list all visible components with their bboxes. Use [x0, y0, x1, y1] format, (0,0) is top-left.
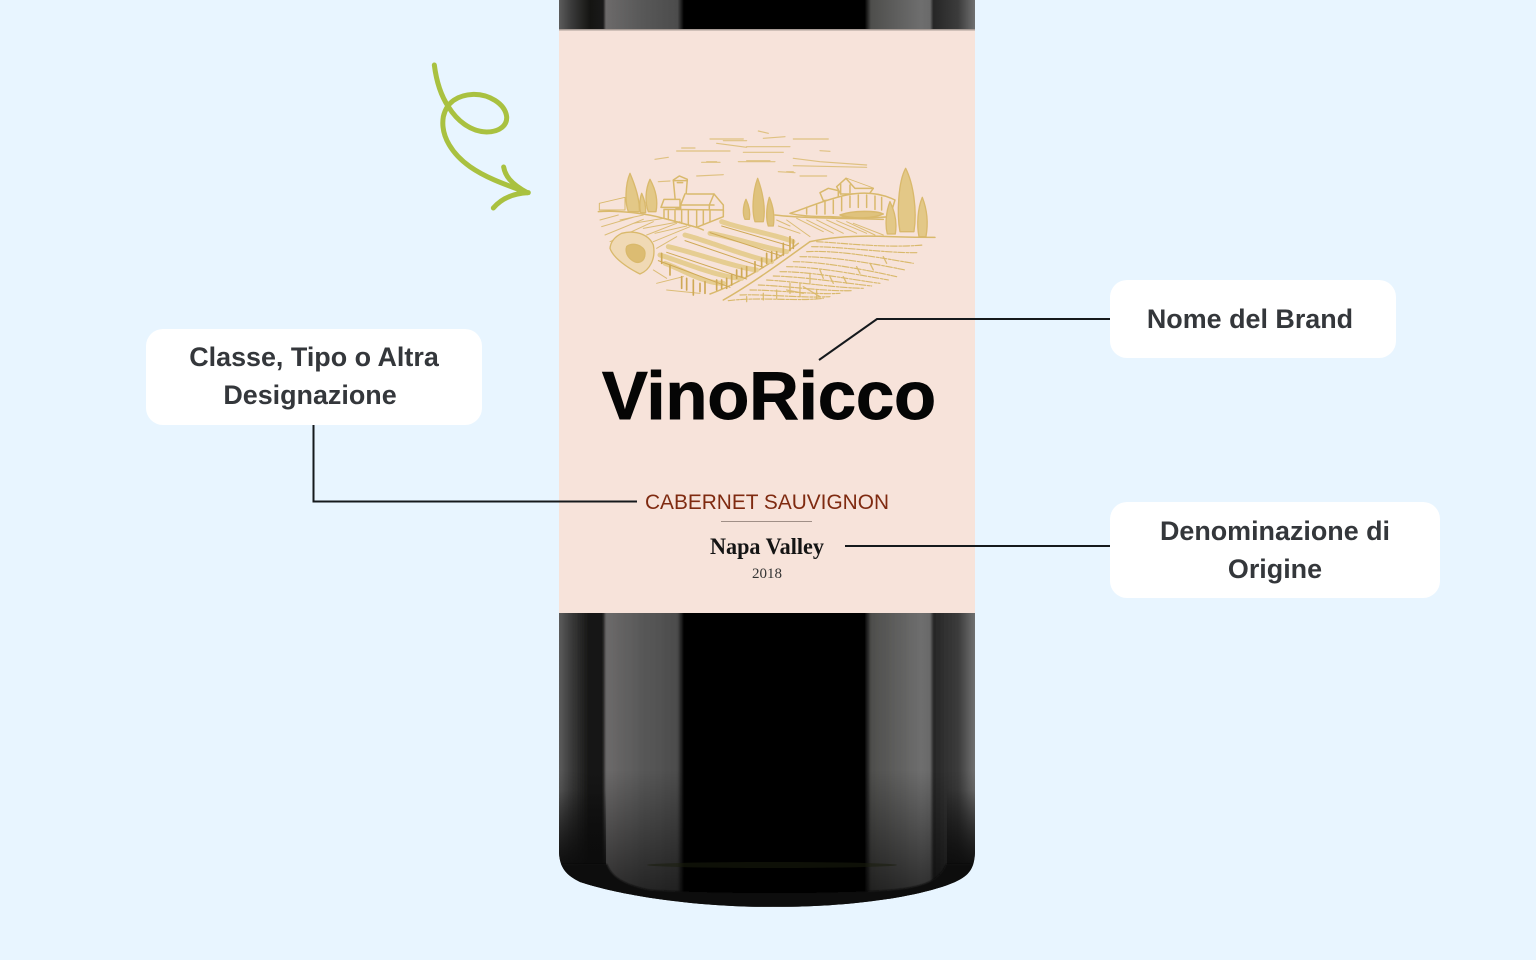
callout: origin: Denominazione di — [1160, 516, 1390, 546]
callout: class: Designazione — [223, 380, 397, 410]
callout: class: Classe, Tipo o Altra — [189, 342, 439, 372]
left cypress trees — [626, 173, 657, 213]
ground and field lines — [598, 197, 935, 300]
brand name: VinoRicco — [602, 358, 936, 434]
callout: origin: Origine — [1228, 554, 1322, 584]
leader line: brand — [819, 319, 1110, 360]
clouds — [655, 131, 867, 182]
wine bottle — [552, 0, 982, 916]
wine type: CABERNET SAUVIGNON — [645, 490, 889, 514]
bottle body below label — [552, 606, 982, 916]
icon: curly green arrow — [434, 65, 528, 208]
vintage: 2018 — [752, 566, 782, 582]
bottle label — [559, 30, 975, 613]
callout: brand: Nome del Brand — [1147, 304, 1353, 334]
right field furrows — [728, 242, 923, 301]
right hill farmhouse — [790, 178, 895, 218]
label top edge — [559, 29, 975, 30]
callout: class — [146, 329, 482, 425]
bottle neck section above label — [559, 0, 975, 31]
label divider — [721, 521, 812, 522]
field hatching left — [600, 215, 883, 293]
appellation: Napa Valley — [710, 534, 824, 559]
callout: origin — [1110, 502, 1440, 598]
illustration: vineyard landscape — [598, 131, 935, 302]
round bush — [610, 232, 654, 274]
right cypress trees — [886, 168, 927, 237]
leader line: class — [314, 425, 637, 502]
leader line: origin — [845, 545, 1110, 547]
centre cypress trees — [743, 178, 774, 226]
callout: brand — [1110, 280, 1396, 358]
left farmhouse — [661, 176, 723, 227]
vineyard rows — [660, 222, 793, 283]
